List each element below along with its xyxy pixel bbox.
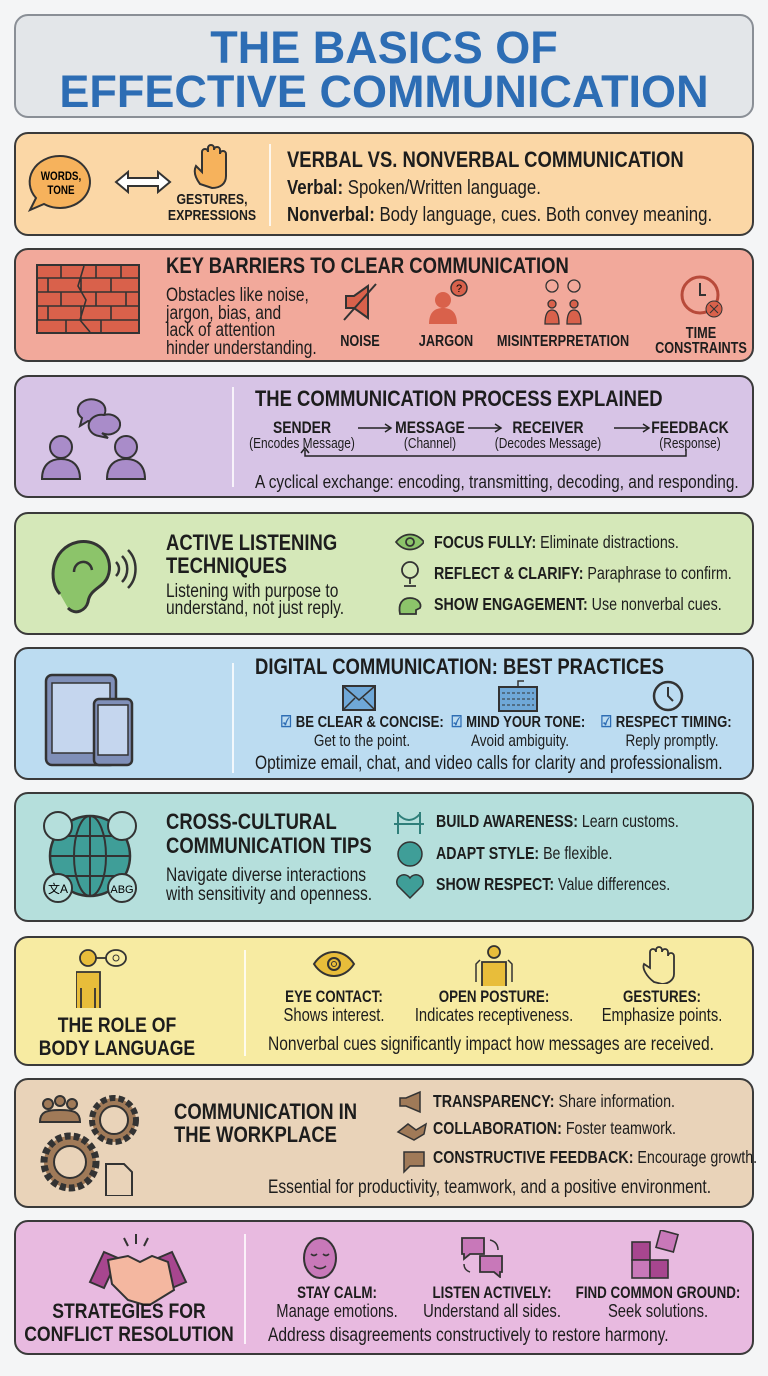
icon: eye — [312, 951, 356, 977]
icon: globe with circles: 文A — [48, 881, 68, 896]
heading: COMMUNICATION TIPS — [166, 833, 372, 858]
icon: handshake — [88, 1234, 188, 1306]
body language items: EYE CONTACT: — [285, 988, 383, 1006]
heading: BODY LANGUAGE — [39, 1036, 195, 1060]
text block — [166, 285, 317, 358]
heading: CROSS-CULTURAL — [166, 809, 337, 834]
conflict items: LISTEN ACTIVELY: — [433, 1284, 551, 1302]
process flow: (Encodes Message) — [249, 436, 355, 452]
list: tips: ADAPT STYLE: Be flexible. — [436, 843, 612, 863]
text block: Nonverbal: Body language, cues. Both convey meaning. — [287, 203, 712, 226]
label: gestures: EXPRESSIONS — [168, 207, 256, 224]
panel: conflict resolution — [14, 1220, 754, 1355]
icon: envelope — [342, 685, 376, 711]
best practices items — [280, 714, 732, 750]
conflict items: Understand all sides. — [423, 1301, 561, 1321]
heading — [166, 809, 372, 858]
list: tips — [394, 811, 679, 899]
process flow: (Response) — [659, 436, 721, 452]
caption: Optimize email, chat, and video calls for clarity and professionalism. — [255, 753, 723, 774]
conflict items: FIND COMMON GROUND: — [576, 1284, 740, 1302]
process flow: MESSAGE — [395, 418, 465, 437]
panel: digital communication — [14, 647, 754, 780]
conflict items: Manage emotions. — [276, 1301, 398, 1321]
conflict items — [266, 1285, 756, 1321]
icon: clock — [652, 680, 684, 712]
icon: calm face — [303, 1237, 337, 1279]
conflict items: Seek solutions. — [608, 1301, 708, 1321]
text block: with sensitivity and openness. — [166, 884, 372, 905]
body language items: GESTURES: — [623, 988, 701, 1006]
icon: globe with circles — [43, 811, 137, 903]
icon: time constraints — [655, 276, 747, 357]
text block: hinder understanding. — [166, 338, 317, 358]
panel: cross-cultural — [14, 792, 754, 922]
label: gestures: GESTURES, — [176, 191, 248, 208]
heading — [166, 530, 337, 578]
text block: lack of attention — [166, 320, 275, 341]
list: workplace: COLLABORATION: Foster teamwork. — [433, 1118, 676, 1138]
icon: brick wall — [36, 264, 140, 334]
icon: hand — [194, 144, 227, 189]
icon: keyboard — [498, 680, 538, 712]
title text: EFFECTIVE COMMUNICATION — [59, 66, 709, 117]
icon: jargon: JARGON — [419, 333, 473, 350]
text block: understand, not just reply. — [166, 598, 344, 619]
best practices items: ☑ MIND YOUR TONE: — [451, 714, 585, 731]
heading — [174, 1099, 357, 1147]
icon: open posture — [475, 945, 513, 986]
text block — [166, 865, 372, 905]
icon: person with eye — [76, 949, 127, 1008]
list: tips: BUILD AWARENESS: Learn customs. — [436, 811, 679, 831]
icon: speech bubble words tone: TONE — [47, 184, 75, 197]
heading: THE WORKPLACE — [174, 1122, 337, 1147]
list: workplace — [396, 1090, 757, 1174]
list: techniques: SHOW ENGAGEMENT: Use nonverbal cues. — [434, 594, 722, 614]
list: workplace: CONSTRUCTIVE FEEDBACK: Encourage growth. — [433, 1147, 757, 1167]
icon: chat exchange — [461, 1237, 503, 1278]
text block: Navigate diverse interactions — [166, 865, 366, 886]
process flow: FEEDBACK — [651, 418, 729, 437]
title text — [59, 22, 709, 117]
process flow: SENDER — [273, 418, 331, 437]
heading — [39, 1013, 195, 1060]
process flow: (Decodes Message) — [495, 436, 601, 452]
list: techniques: FOCUS FULLY: Eliminate distractions. — [434, 532, 679, 552]
panel: communication process — [14, 375, 754, 498]
text block: Obstacles like noise, — [166, 285, 309, 306]
panel: verbal vs nonverbal — [14, 132, 754, 236]
heading: ACTIVE LISTENING — [166, 530, 337, 555]
text block: Listening with purpose to — [166, 581, 338, 602]
icon: jargon: ? — [456, 283, 462, 295]
text block: jargon, bias, and — [166, 302, 281, 324]
heading: VERBAL VS. NONVERBAL COMMUNICATION — [287, 147, 684, 172]
icon: misinterpretation — [497, 279, 629, 350]
icon: speech bubble words tone: WORDS, — [41, 170, 81, 183]
list: workplace: TRANSPARENCY: Share information. — [433, 1091, 675, 1111]
icon: double arrow — [114, 170, 172, 194]
panel: body language — [14, 936, 754, 1066]
icon: tablet and phone — [44, 674, 134, 766]
best practices items: Get to the point. — [314, 732, 410, 750]
panel: workplace — [14, 1078, 754, 1208]
title text: THE BASICS OF — [210, 22, 558, 73]
best practices items: Reply promptly. — [626, 732, 718, 750]
icon: speech bubble words tone — [28, 155, 91, 212]
body language items: Emphasize points. — [602, 1005, 722, 1025]
best practices items: ☑ RESPECT TIMING: — [600, 714, 732, 731]
body language items: Indicates receptiveness. — [415, 1005, 573, 1025]
caption: Nonverbal cues significantly impact how messages are received. — [268, 1034, 714, 1055]
process flow: RECEIVER — [512, 418, 584, 437]
heading: TECHNIQUES — [166, 553, 287, 578]
label: gestures — [168, 191, 256, 224]
icon: puzzle — [628, 1230, 680, 1280]
panel: active listening — [14, 512, 754, 635]
heading — [24, 1299, 234, 1346]
heading: DIGITAL COMMUNICATION: BEST PRACTICES — [255, 654, 664, 679]
text block — [166, 581, 344, 619]
list: techniques: REFLECT & CLARIFY: Paraphrase to confirm. — [434, 563, 732, 583]
body language items: Shows interest. — [284, 1005, 384, 1025]
icon: misinterpretation: MISINTERPRETATION — [497, 333, 629, 350]
icon: two people with bubbles — [41, 398, 146, 480]
heading: KEY BARRIERS TO CLEAR COMMUNICATION — [166, 253, 569, 278]
panel: barriers — [14, 248, 754, 362]
icon: noise — [340, 283, 380, 350]
heading: CONFLICT RESOLUTION — [24, 1322, 234, 1346]
icon: gestures — [642, 946, 675, 984]
icon: gears and team — [39, 1095, 139, 1196]
conflict items: STAY CALM: — [297, 1284, 377, 1302]
best practices items: ☑ BE CLEAR & CONCISE: — [280, 714, 444, 731]
list: techniques — [394, 532, 732, 615]
heading: COMMUNICATION IN — [174, 1099, 357, 1124]
heading: THE ROLE OF — [58, 1013, 176, 1037]
caption: A cyclical exchange: encoding, transmitting, decoding, and responding. — [255, 471, 739, 492]
text block — [287, 176, 712, 226]
text block: Verbal: Spoken/Written language. — [287, 176, 541, 199]
icon: time constraints: TIME — [686, 325, 716, 342]
body language items — [284, 988, 722, 1025]
best practices items: Avoid ambiguity. — [471, 732, 569, 750]
heading: STRATEGIES FOR — [52, 1299, 206, 1323]
icon: jargon — [419, 279, 473, 350]
caption: Address disagreements constructively to restore harmony. — [268, 1325, 669, 1346]
title panel — [14, 14, 754, 118]
list: tips: SHOW RESPECT: Value differences. — [436, 874, 670, 894]
icon: globe with circles: ABG — [110, 884, 134, 896]
process flow: (Channel) — [404, 436, 456, 452]
icon: ear — [52, 540, 137, 614]
icon: time constraints: CONSTRAINTS — [655, 340, 747, 357]
heading: THE COMMUNICATION PROCESS EXPLAINED — [255, 386, 663, 411]
caption: Essential for productivity, teamwork, and a positive environment. — [268, 1177, 711, 1198]
body language items: OPEN POSTURE: — [439, 988, 549, 1006]
process flow — [249, 418, 729, 457]
icon: noise: NOISE — [340, 333, 380, 350]
